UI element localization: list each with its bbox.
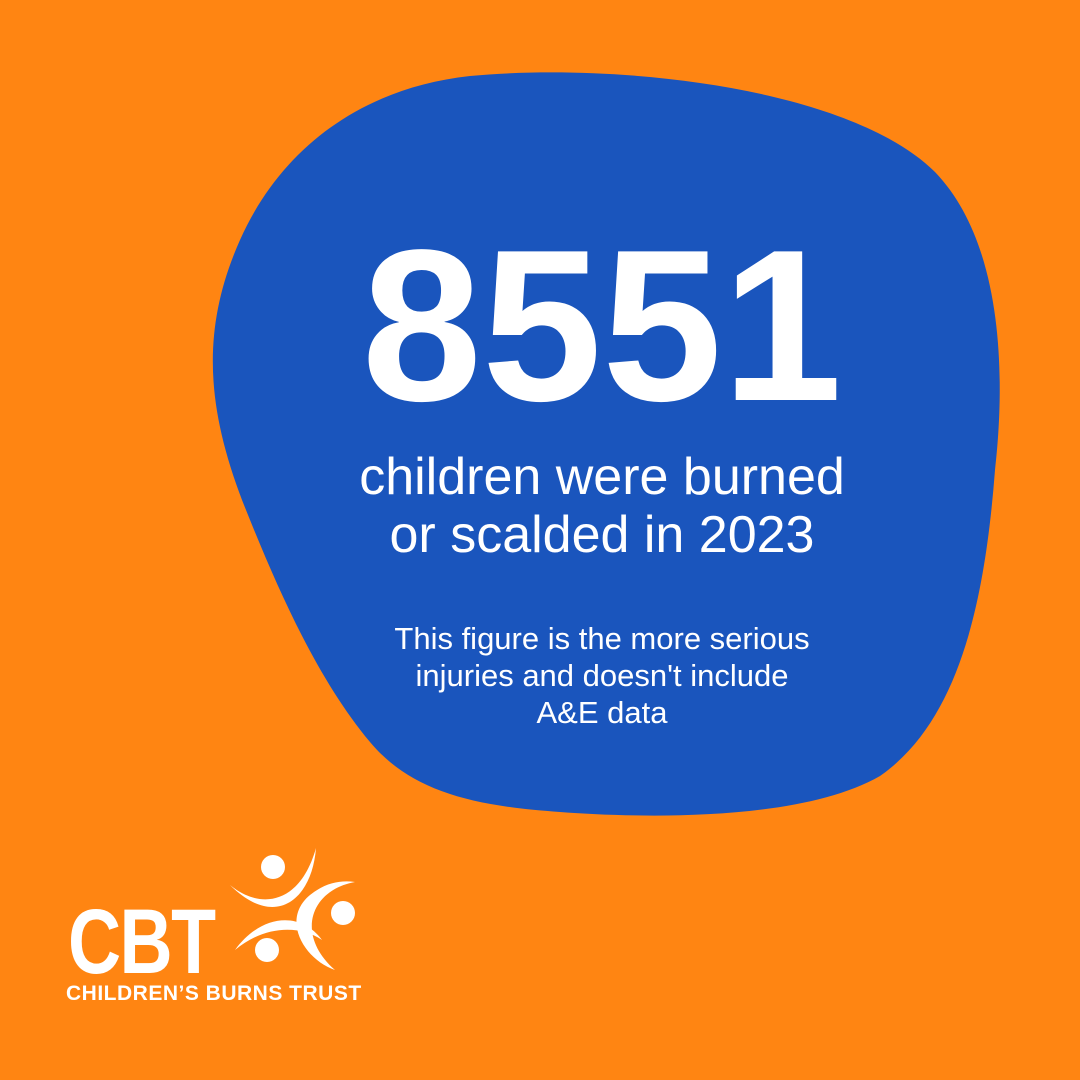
note text [394,621,810,730]
note text: A&E data [536,695,667,730]
logo subtitle: CHILDREN’S BURNS TRUST [66,982,362,1005]
logo [66,848,362,1005]
headline text: or scalded in 2023 [390,506,814,564]
headline text: children were burned [359,448,845,506]
note text: This figure is the more serious [394,621,810,656]
note text: injuries and doesn't include [416,658,788,693]
headline text [359,448,845,564]
big number: 8551 [362,204,842,446]
logo text CBT: CBT [68,891,214,993]
logo icon [230,848,355,970]
